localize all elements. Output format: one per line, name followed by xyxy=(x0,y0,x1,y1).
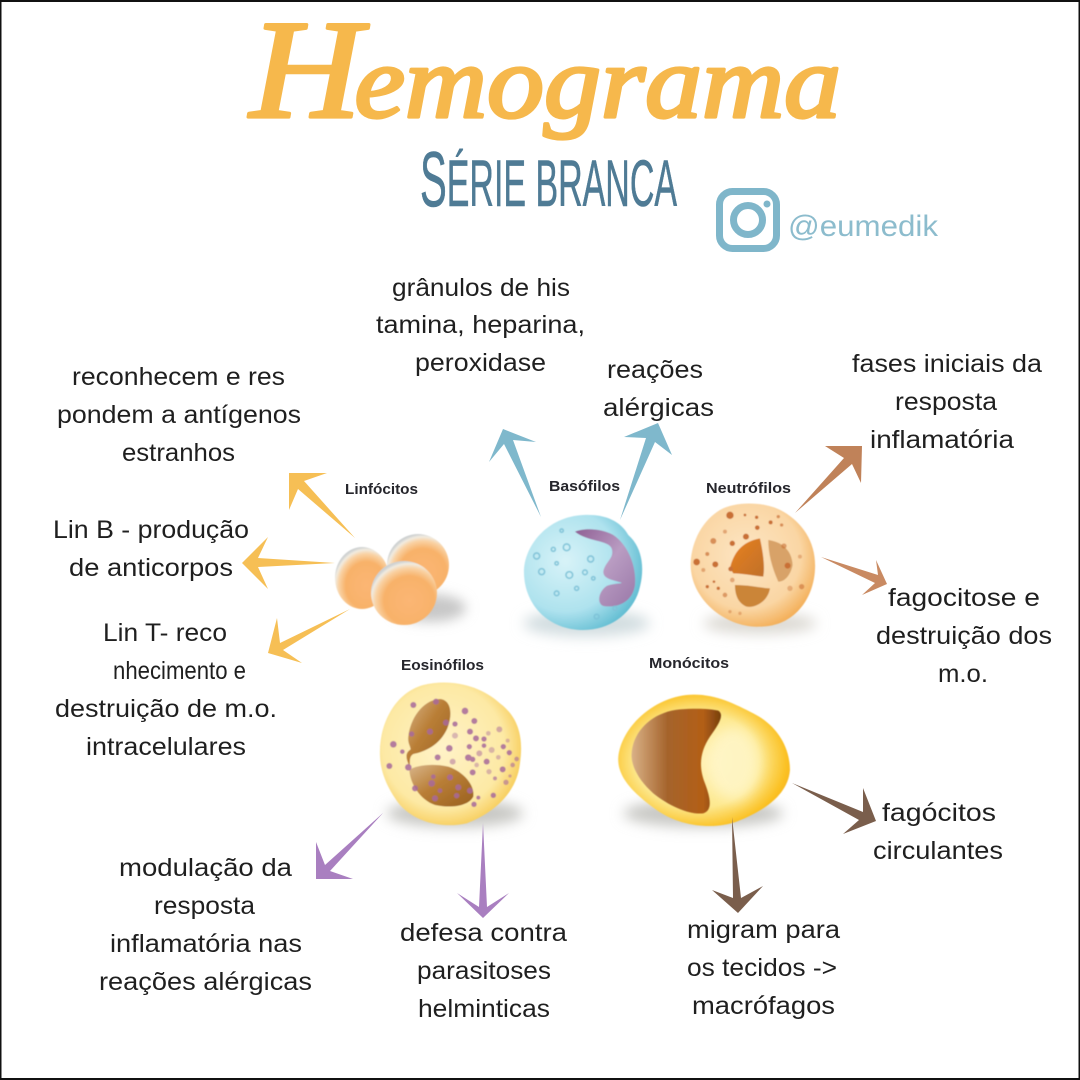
arrow: phagocytosis xyxy=(821,557,887,595)
panel: monocytes xyxy=(618,655,1003,1020)
text: recognition: estranhos xyxy=(122,439,235,467)
arrow: tissue migration xyxy=(712,817,763,913)
text: tissue migration xyxy=(687,916,840,1020)
handle text: @eumedik xyxy=(788,210,939,243)
text: parasite defense: defesa contra xyxy=(400,919,567,947)
text: recognition: reconhecem e res xyxy=(72,363,285,391)
arrow: granules xyxy=(489,429,541,517)
arrow: circulating phagocytes xyxy=(792,783,876,834)
icon: lymphocyte cells xyxy=(335,534,466,625)
arrow: antigens xyxy=(289,473,355,538)
text: parasite defense: helminticas xyxy=(418,995,550,1023)
arrow: parasite defense xyxy=(457,823,509,918)
label: Basófilos: Basófilos xyxy=(549,478,620,495)
text: allergic reactions: reações xyxy=(607,356,703,384)
icon: neutrophil cell xyxy=(691,504,817,634)
text: parasite defense xyxy=(400,919,567,1023)
arrow: B lymphocytes xyxy=(242,537,335,589)
text: granules: tamina, heparina, xyxy=(376,311,585,339)
panel: neutrophils xyxy=(691,350,1052,688)
icon: instagram xyxy=(720,192,776,248)
icon: eosinophil cell xyxy=(380,682,523,827)
arrow: early inflammation xyxy=(795,446,862,513)
label: Linfócitos: Linfócitos xyxy=(345,481,418,498)
panel: eosinophils xyxy=(99,657,567,1023)
text: granules: peroxidase xyxy=(415,349,546,377)
text: tissue migration: os tecidos -> xyxy=(687,954,837,982)
label: Neutrófilos: Neutrófilos xyxy=(706,480,791,497)
text: granules xyxy=(376,274,585,377)
arrow: T lymphocytes xyxy=(268,609,350,663)
text: circulating phagocytes: fagócitos xyxy=(882,799,996,827)
panel: basophils xyxy=(376,274,714,637)
text: Lin T: destruição de m.o. xyxy=(55,695,277,723)
text: Lin T: nhecimento e xyxy=(113,657,246,685)
text: tissue migration: macrófagos xyxy=(692,992,835,1020)
text: Lin T xyxy=(55,619,277,761)
text: phagocytosis: destruição dos xyxy=(876,622,1052,650)
icon: monocyte cell xyxy=(618,695,790,827)
text: modulation xyxy=(99,854,312,996)
text: inflammatory phases: resposta xyxy=(895,388,997,416)
text: modulation: inflamatória nas xyxy=(110,930,302,958)
icon: basophil cell xyxy=(523,515,650,637)
text: phagocytosis: fagocitose e xyxy=(888,584,1040,612)
text: Lin B xyxy=(53,516,249,582)
text: recognition xyxy=(57,363,301,467)
text: phagocytosis xyxy=(876,584,1052,688)
text: modulation: modulação da xyxy=(119,854,292,882)
text: tissue migration: migram para xyxy=(687,916,840,944)
text: circulating phagocytes: circulantes xyxy=(873,837,1003,865)
text: parasite defense: parasitoses xyxy=(417,957,551,985)
text: inflammatory phases xyxy=(852,350,1042,454)
label: Monócitos: Monócitos xyxy=(649,655,729,672)
text: allergic reactions xyxy=(603,356,714,422)
text: Lin B: Lin B - produção xyxy=(53,516,249,544)
instagram handle xyxy=(720,192,939,248)
subtitle: SÉRIE BRANCA xyxy=(420,135,677,223)
text: phagocytosis: m.o. xyxy=(938,660,988,688)
panel: lymphocytes xyxy=(53,363,466,761)
label: Eosinófilos: Eosinófilos xyxy=(401,657,484,674)
text: recognition: pondem a antígenos xyxy=(57,401,301,429)
text: inflammatory phases: inflamatória xyxy=(870,426,1014,454)
text: inflammatory phases: fases iniciais da xyxy=(852,350,1042,378)
text: Lin T: intracelulares xyxy=(86,733,246,761)
text: modulation: reações alérgicas xyxy=(99,968,312,996)
text: modulation: resposta xyxy=(154,892,255,920)
text: Lin T: Lin T- reco xyxy=(103,619,227,647)
arrow: allergic reactions xyxy=(620,423,672,520)
text: granules: grânulos de his xyxy=(392,274,570,302)
arrow: inflammatory modulation xyxy=(316,813,383,879)
text: allergic reactions: alérgicas xyxy=(603,394,714,422)
text: Lin B: de anticorpos xyxy=(69,554,233,582)
text: circulating phagocytes xyxy=(873,799,1003,865)
